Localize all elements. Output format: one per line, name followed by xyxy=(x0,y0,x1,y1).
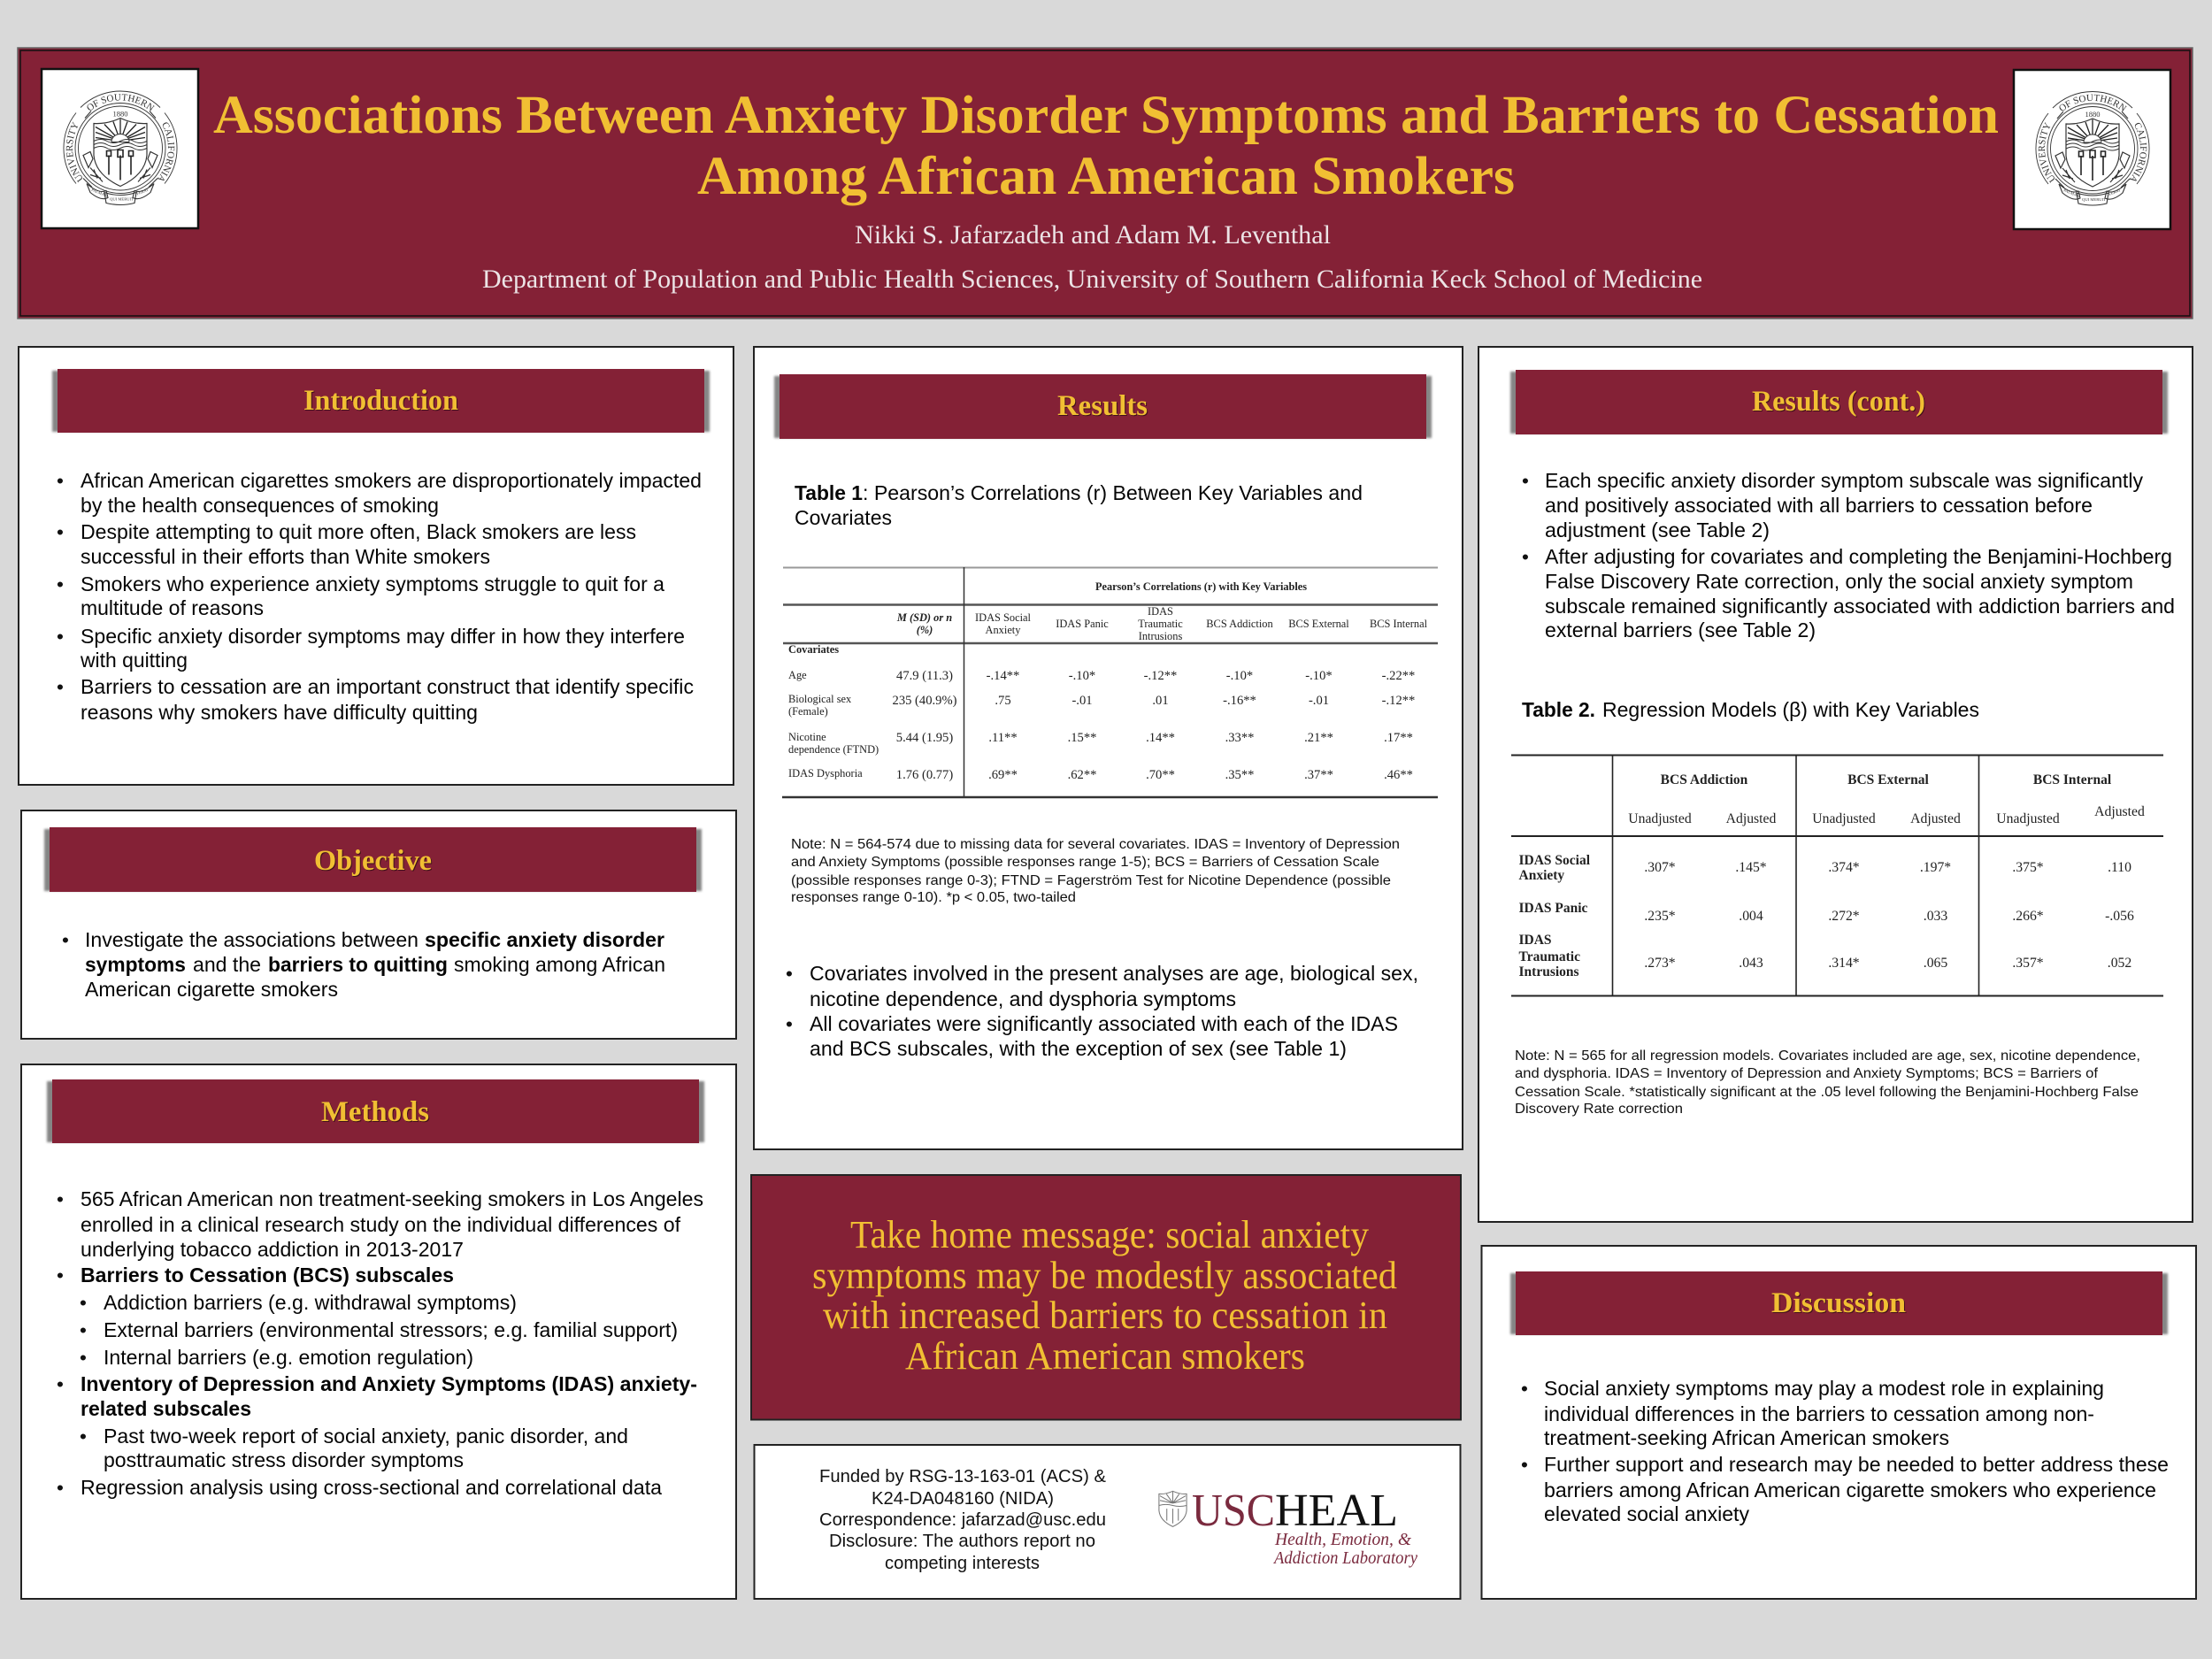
bullet list: methods: Barriers to Cessation (BCS) subscales xyxy=(81,1263,454,1286)
table 2 header: Unadjusted xyxy=(1812,811,1876,826)
table 1 note: and Anxiety Symptoms (possible responses range 1-5); BCS = Barriers of Cessation Scale xyxy=(791,855,1379,870)
table 1 rows: .37** xyxy=(1304,768,1333,782)
table 1 note: Note: N = 564-574 due to missing data for several covariates. IDAS = Inventory of Depression xyxy=(791,837,1400,852)
bullet list: results continued: and positively associated with all barriers to cessation before xyxy=(1545,494,2093,517)
table 2 rows: -.056 xyxy=(2105,909,2134,924)
bullet list: methods: • xyxy=(57,1477,64,1499)
table 1 rows: -.10* xyxy=(1305,669,1333,683)
bullet list: methods xyxy=(57,1187,703,1499)
table 2 note xyxy=(1515,1048,2140,1117)
bullet list: covariates: All covariates were significantly associated with each of the IDAS xyxy=(810,1012,1398,1035)
table 2 header: Unadjusted xyxy=(1996,811,2060,826)
bullet list: introduction: • xyxy=(57,573,64,595)
icon: right USC seal: CALIFORNIA xyxy=(2129,122,2147,181)
text block: objective: Investigate the associations between xyxy=(85,928,419,951)
bullet list: results continued xyxy=(1522,469,2175,641)
bullet list: methods: • xyxy=(57,1264,64,1286)
bullet list: methods: Regression analysis using cross-sectional and correlational data xyxy=(81,1476,662,1499)
table 1 caption xyxy=(795,481,1363,529)
bullet list: methods: Internal barriers (e.g. emotion regulation) xyxy=(104,1346,473,1369)
bullet list: introduction: • xyxy=(57,676,64,698)
table 1 rows: (Female) xyxy=(788,705,828,718)
bullet list: methods: • xyxy=(57,1188,64,1210)
table 1 rows: dependence (FTND) xyxy=(788,743,879,756)
bullet list: methods: • xyxy=(80,1425,87,1448)
bullet list: covariates xyxy=(786,962,1418,1060)
panel: results continued xyxy=(1479,347,2193,1222)
panel: results xyxy=(754,347,1463,1149)
icon: right USC seal: UNIVERSITY xyxy=(2039,122,2055,183)
bullet list: introduction: • xyxy=(57,626,64,648)
icon: left USC seal xyxy=(41,67,200,230)
bullet list: results continued: adjustment (see Table 2) xyxy=(1545,518,1770,541)
table 1 rows: 5.44 (1.95) xyxy=(896,731,953,745)
bullet list: introduction: African American cigarettes smokers are disproportionately impacted xyxy=(81,469,702,492)
table 1 rows: Age xyxy=(788,669,807,681)
table 2 rows: IDAS Social xyxy=(1518,853,1591,868)
table 1 rows: -.10* xyxy=(1069,669,1095,683)
table 1 rows: 47.9 (11.3) xyxy=(896,669,953,683)
bullet list: methods: 565 African American non treatment-seeking smokers in Los Angeles xyxy=(81,1187,703,1210)
panel: take home message: with increased barriers to cessation in xyxy=(823,1294,1387,1337)
table 2 rows: .033 xyxy=(1924,909,1947,924)
heading: objective xyxy=(44,827,702,892)
bullet list: methods: posttraumatic stress disorder symptoms xyxy=(104,1448,464,1471)
icon: left USC seal: QUI MERUIT xyxy=(110,196,134,202)
bullet list: introduction: successful in their efforts than White smokers xyxy=(81,545,490,568)
table 2: regression models xyxy=(1511,755,2163,996)
panel: take home message xyxy=(751,1175,1461,1419)
table 1: correlations xyxy=(782,567,1438,797)
heading: introduction xyxy=(52,369,710,433)
table 1 rows: -.12** xyxy=(1144,669,1177,683)
table 2 rows: Anxiety xyxy=(1518,868,1564,883)
bullet list: results continued: • xyxy=(1522,546,1529,568)
text block: objective: and the xyxy=(193,953,261,976)
bullet list: covariates: Covariates involved in the present analyses are age, biological sex, xyxy=(810,962,1418,985)
logo: USC HEAL: USC xyxy=(1192,1486,1275,1536)
table 1 header: BCS Internal xyxy=(1370,618,1428,630)
bullet list: discussion: Further support and research may be needed to better address these xyxy=(1544,1453,2169,1476)
bullet list: results continued: False Discovery Rate correction, only the social anxiety symptom xyxy=(1545,570,2133,593)
bullet list: introduction: Despite attempting to quit more often, Black smokers are less xyxy=(81,520,636,543)
bullet list: introduction: by the health consequences of smoking xyxy=(81,494,439,517)
table 1 rows: 235 (40.9%) xyxy=(893,694,957,708)
bullet list: introduction: reasons why smokers have difficulty quitting xyxy=(81,701,478,724)
table 1 caption: Table 1 xyxy=(795,481,863,504)
table 1 rows: -.16** xyxy=(1223,694,1256,708)
table 1 caption: : Pearson’s Correlations (r) Between Key Variables and xyxy=(863,481,1363,504)
funding text: competing interests xyxy=(885,1553,1040,1573)
bullet list: results continued: Each specific anxiety disorder symptom subscale was significantly xyxy=(1545,469,2144,492)
table 1 rows: .11** xyxy=(988,731,1018,745)
table 2 note: Cessation Scale. *statistically significant at the .05 level following the Benjamini-Hochberg False xyxy=(1515,1085,2139,1100)
icon: left USC seal: PALMAM xyxy=(91,188,109,198)
table 1 rows: -.01 xyxy=(1309,694,1329,708)
bullet list: discussion: barriers among African American cigarette smokers who experience xyxy=(1544,1479,2156,1502)
table 1 rows: IDAS Dysphoria xyxy=(788,767,863,780)
table 2 caption: Table 2. xyxy=(1522,698,1595,721)
bullet list: introduction xyxy=(57,469,702,724)
funding text: Funded by RSG-13-163-01 (ACS) & xyxy=(819,1466,1106,1486)
bullet list: methods: Past two-week report of social anxiety, panic disorder, and xyxy=(104,1425,628,1448)
table 1 rows: Nicotine xyxy=(788,731,826,743)
table 2 header: Adjusted xyxy=(1726,811,1776,826)
bullet list: discussion xyxy=(1521,1377,2169,1525)
text block: objective: • xyxy=(62,929,69,951)
table 1 header: Anxiety xyxy=(986,624,1021,636)
table 1 rows: .14** xyxy=(1146,731,1175,745)
table 1 header: IDAS xyxy=(1148,605,1173,618)
table 1 rows: .46** xyxy=(1384,768,1413,782)
heading: results: Results xyxy=(1057,390,1148,422)
panel: funding and logo xyxy=(754,1445,1460,1599)
bullet list: methods: enrolled in a clinical research study on the individual differences of xyxy=(81,1213,681,1236)
table 2 rows: .273* xyxy=(1644,956,1676,971)
heading: results xyxy=(774,374,1432,439)
icon: left USC seal: FERAT xyxy=(136,187,150,196)
bullet list: methods: • xyxy=(57,1373,64,1395)
table 2 header xyxy=(1628,772,2145,826)
table 1 rows: Biological sex xyxy=(788,693,852,705)
bullet list: discussion: • xyxy=(1521,1454,1528,1476)
table 2 rows: .375* xyxy=(2012,860,2044,875)
table 2 rows: .043 xyxy=(1739,956,1763,971)
header banner xyxy=(17,47,2193,319)
table 2 rows: .235* xyxy=(1644,909,1676,924)
table 2 rows: Intrusions xyxy=(1518,964,1579,979)
panel: take home message: symptoms may be modestly associated xyxy=(812,1254,1397,1297)
table 2 note: Discovery Rate correction xyxy=(1515,1102,1683,1117)
bullet list: methods: Inventory of Depression and Anxiety Symptoms (IDAS) anxiety- xyxy=(81,1372,697,1395)
heading: results continued: Results (cont.) xyxy=(1752,386,1925,418)
table 1 header: (%) xyxy=(917,624,933,636)
table 2 header: BCS External xyxy=(1847,772,1930,787)
affiliation: Department of Population and Public Health Sciences, University of Southern California Keck School of Medicine xyxy=(482,265,1702,294)
bullet list: discussion: Social anxiety symptoms may play a modest role in explaining xyxy=(1544,1377,2104,1400)
table 2 rows: IDAS Panic xyxy=(1518,901,1588,916)
table 1 rows: .01 xyxy=(1152,694,1169,708)
table 1 rows: .35** xyxy=(1225,768,1254,782)
bullet list: introduction: Smokers who experience anxiety symptoms struggle to quit for a xyxy=(81,572,664,595)
bullet list: results continued: • xyxy=(1522,470,1529,492)
table 1 note: (possible responses range 0-3); FTND = Fagerström Test for Nicotine Dependence (possible xyxy=(791,873,1391,888)
bullet list: methods: • xyxy=(80,1347,87,1369)
bullet list: introduction: multitude of reasons xyxy=(81,596,264,619)
logo: USC HEAL xyxy=(1159,1486,1417,1568)
bullet list: methods: External barriers (environmental stressors; e.g. familial support) xyxy=(104,1318,678,1341)
table 1 rows: .15** xyxy=(1068,731,1096,745)
table 2 header: Adjusted xyxy=(2094,804,2145,819)
table 2 rows: .272* xyxy=(1828,909,1860,924)
bullet list: covariates: nicotine dependence, and dysphoria symptoms xyxy=(810,987,1236,1010)
bullet list: results continued: subscale remained significantly associated with addiction barriers and xyxy=(1545,595,2175,618)
text block: objective: barriers to quitting xyxy=(268,953,448,976)
title xyxy=(213,86,1999,206)
text block: objective: American cigarette smokers xyxy=(85,978,338,1001)
table 1 header: M (SD) or n xyxy=(896,611,952,624)
bullet list: covariates: and BCS subscales, with the exception of sex (see Table 1) xyxy=(810,1037,1347,1060)
icon: right USC seal: OF SOUTHERN xyxy=(2060,94,2127,111)
table 1 rows: .70** xyxy=(1146,768,1175,782)
icon: right USC seal: FERAT xyxy=(2108,188,2122,196)
table 2 rows: IDAS xyxy=(1518,933,1552,948)
funding text: Disclosure: The authors report no xyxy=(829,1531,1095,1551)
table 1 rows: .75 xyxy=(995,694,1011,708)
table 1 rows xyxy=(788,643,1415,782)
bullet list: results continued: external barriers (see Table 2) xyxy=(1545,618,1816,641)
panel: take home message: African American smokers xyxy=(905,1334,1305,1378)
logo: USC HEAL: Addiction Laboratory xyxy=(1272,1548,1417,1568)
logo: USC HEAL: HEAL xyxy=(1275,1486,1398,1536)
table 2 rows: .065 xyxy=(1924,956,1947,971)
bullet list: methods: • xyxy=(80,1319,87,1341)
table 2 header: Unadjusted xyxy=(1628,811,1692,826)
panel: objective xyxy=(21,810,736,1039)
table 1 rows: .69** xyxy=(988,768,1018,782)
bullet list: introduction: • xyxy=(57,470,64,492)
text block: objective xyxy=(62,928,665,1001)
bullet list: discussion: treatment-seeking African American smokers xyxy=(1544,1426,1949,1449)
table 1 rows: Covariates xyxy=(788,643,839,656)
table 1 rows: -.01 xyxy=(1071,694,1093,708)
table 2 rows: .004 xyxy=(1739,909,1763,924)
table 1 rows: 1.76 (0.77) xyxy=(896,768,953,782)
table 1 rows: -.12** xyxy=(1382,694,1415,708)
table 2 rows: .110 xyxy=(2108,860,2131,875)
funding text xyxy=(819,1466,1106,1573)
bullet list: discussion: • xyxy=(1521,1378,1528,1400)
bullet list: methods: underlying tobacco addiction in 2013-2017 xyxy=(81,1238,464,1261)
authors: Nikki S. Jafarzadeh and Adam M. Leventhal xyxy=(855,220,1331,250)
table 1 header: Traumatic xyxy=(1138,618,1183,630)
text block: objective: smoking among African xyxy=(454,953,665,976)
icon: left USC seal: CALIFORNIA xyxy=(157,122,175,180)
funding text: Correspondence: jafarzad@usc.edu xyxy=(819,1509,1106,1530)
icon: right USC seal: QUI MERUIT xyxy=(2082,197,2106,202)
table 2 rows xyxy=(1518,853,2134,979)
table 2 caption: Regression Models (β) with Key Variables xyxy=(1602,698,1979,721)
bullet list: discussion: individual differences in the barriers to cessation among non- xyxy=(1544,1402,2094,1425)
heading: discussion xyxy=(1510,1271,2168,1335)
icon: right USC seal: 1880 xyxy=(2085,110,2101,119)
table 2 rows: .307* xyxy=(1644,860,1676,875)
icon: right USC seal: PALMAM xyxy=(2063,188,2081,198)
logo: USC HEAL: Health, Emotion, & xyxy=(1274,1530,1411,1549)
bullet list: introduction: with quitting xyxy=(80,649,188,672)
table 2 rows: .374* xyxy=(1828,860,1860,875)
table 1 rows: -.22** xyxy=(1382,669,1415,683)
heading: objective: Objective xyxy=(314,845,432,877)
panel: take home message: Take home message: social anxiety xyxy=(850,1213,1369,1256)
panel: methods xyxy=(21,1064,736,1599)
table 1 header: IDAS Panic xyxy=(1056,618,1109,630)
panel: introduction xyxy=(19,347,733,785)
title: Among African American Smokers xyxy=(697,147,1515,206)
table 1 header: Intrusions xyxy=(1139,630,1182,642)
heading: methods xyxy=(47,1079,704,1143)
icon: left USC seal: 1880 xyxy=(113,110,127,119)
table 2 header: BCS Addiction xyxy=(1661,772,1748,787)
table 1 rows: .33** xyxy=(1225,731,1254,745)
table 2 note: Note: N = 565 for all regression models. Covariates included are age, sex, nicotine dependence, xyxy=(1515,1048,2140,1064)
table 2 rows: .197* xyxy=(1920,860,1951,875)
text block: objective: specific anxiety disorder xyxy=(425,928,664,951)
heading: introduction: Introduction xyxy=(303,385,458,417)
bullet list: introduction: Specific anxiety disorder symptoms may differ in how they interfere xyxy=(81,625,685,648)
table 1 header: BCS External xyxy=(1288,618,1349,630)
table 1 header: BCS Addiction xyxy=(1206,618,1273,630)
bullet list: methods: Addiction barriers (e.g. withdrawal symptoms) xyxy=(104,1291,517,1314)
table 2 header: Adjusted xyxy=(1910,811,1961,826)
table 2 rows: .314* xyxy=(1828,956,1860,971)
table 1 rows: .17** xyxy=(1384,731,1413,745)
table 1 note xyxy=(791,837,1400,905)
bullet list: introduction: • xyxy=(57,521,64,543)
table 2 rows: .052 xyxy=(2108,956,2131,971)
text block: objective: symptoms xyxy=(85,953,186,976)
table 1 rows: -.14** xyxy=(987,669,1019,683)
table 2 rows: .266* xyxy=(2012,909,2044,924)
bullet list: discussion: elevated social anxiety xyxy=(1544,1502,1749,1525)
table 1 caption: Covariates xyxy=(795,506,892,529)
icon: right USC seal xyxy=(2012,69,2171,230)
table 2 note: and dysphoria. IDAS = Inventory of Depression and Anxiety Symptoms; BCS = Barriers of xyxy=(1515,1066,2099,1081)
heading: methods: Methods xyxy=(321,1096,429,1128)
bullet list: covariates: • xyxy=(786,1013,793,1035)
bullet list: covariates: • xyxy=(786,963,793,985)
table 1 rows: -.10* xyxy=(1226,669,1253,683)
table 1 header: IDAS Social xyxy=(975,611,1032,624)
bullet list: methods: related subscales xyxy=(81,1397,251,1420)
heading: results continued xyxy=(1510,370,2168,434)
heading: discussion: Discussion xyxy=(1771,1287,1906,1319)
title: Associations Between Anxiety Disorder Symptoms and Barriers to Cessation xyxy=(213,86,1999,145)
bullet list: introduction: Barriers to cessation are an important construct that identify specific xyxy=(81,675,694,698)
icon: left USC seal: OF SOUTHERN xyxy=(87,94,155,111)
icon: left USC seal: UNIVERSITY xyxy=(65,122,82,182)
table 2 header: BCS Internal xyxy=(2033,772,2112,787)
table 1 header: Pearson’s Correlations (r) with Key Variables xyxy=(1095,580,1307,593)
table 2 rows: .357* xyxy=(2012,956,2044,971)
bullet list: methods: • xyxy=(80,1292,87,1314)
bullet list: results continued: After adjusting for covariates and completing the Benjamini-Hochberg xyxy=(1545,545,2172,568)
table 1 note: responses range 0-10). *p < 0.05, two-tailed xyxy=(791,890,1076,905)
table 1 rows: .21** xyxy=(1304,731,1333,745)
table 2 rows: .145* xyxy=(1735,860,1767,875)
table 1 header xyxy=(896,580,1428,642)
table 2 rows: Traumatic xyxy=(1518,949,1580,964)
table 1 rows: .62** xyxy=(1068,768,1096,782)
funding text: K24-DA048160 (NIDA) xyxy=(872,1488,1054,1509)
panel: discussion xyxy=(1481,1246,2196,1599)
